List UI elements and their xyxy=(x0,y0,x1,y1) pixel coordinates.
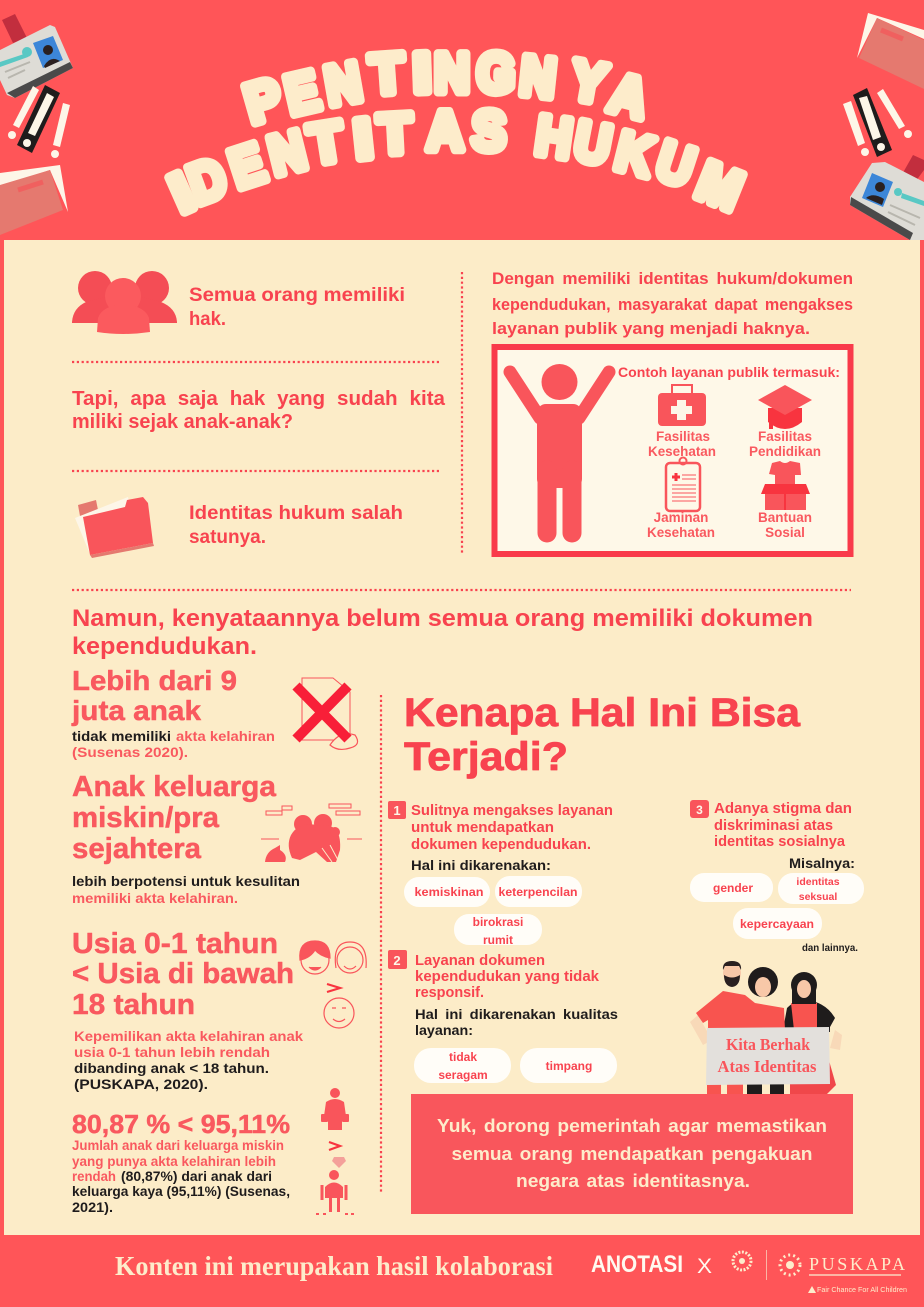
title: I xyxy=(160,160,202,225)
illustration: people with sign xyxy=(690,961,842,1095)
icon: person arms raised xyxy=(510,364,609,533)
pill: gender xyxy=(690,873,773,902)
panel: layanan publik: Kesehatan xyxy=(647,525,715,540)
title xyxy=(160,41,751,225)
text: semua orang: hak. xyxy=(189,309,226,330)
stat: 80,87: rendah xyxy=(72,1169,116,1184)
icon: donation box xyxy=(761,461,810,510)
pill: identitas seksual: identitas xyxy=(796,876,840,888)
title: N xyxy=(320,50,366,118)
title: D xyxy=(180,146,235,217)
pill: kepercayaan: kepercayaan xyxy=(740,917,814,931)
footer: Konten ini merupakan hasil kolaborasi xyxy=(115,1251,553,1281)
stat: usia xyxy=(72,928,303,1092)
pill: birokrasi rumit: birokrasi xyxy=(473,915,523,929)
panel: layanan publik xyxy=(494,347,850,554)
reason 3: dan lainnya. xyxy=(802,942,858,954)
reason 1 xyxy=(388,801,613,947)
heading: kenapa xyxy=(404,691,801,779)
title: N xyxy=(434,42,470,105)
reason 2: Layanan dokumen xyxy=(415,953,545,969)
stat: 9 juta anak: (Susenas 2020). xyxy=(72,745,188,760)
text: tapi: Tapi, apa saja hak yang sudah kita xyxy=(72,388,446,410)
logo: puskapa xyxy=(780,1254,905,1276)
text: dengan memiliki: layanan publik yang menjadi haknya. xyxy=(492,320,810,338)
pill: keterpencilan xyxy=(495,876,582,907)
stat: usia: < Usia di bawah xyxy=(72,958,294,990)
text: identitas hukum: satunya. xyxy=(189,527,266,548)
reason 1: Hal ini dikarenakan: xyxy=(411,857,551,873)
text: dengan memiliki: kependudukan, masyarakat dapat mengakses xyxy=(492,296,853,314)
content panel xyxy=(4,240,920,1235)
reason 2: Hal ini dikarenakan kualitas xyxy=(415,1006,618,1022)
illustration: people with sign: Atas Identitas xyxy=(718,1057,817,1076)
title: K xyxy=(609,120,660,189)
stat: 9 juta anak xyxy=(71,665,275,760)
title: A xyxy=(426,100,464,162)
icon: medical kit xyxy=(658,385,706,426)
title: E xyxy=(279,59,325,128)
stat: anak keluarga miskin: memiliki akta kelahiran. xyxy=(72,890,238,906)
reason 3: diskriminasi atas xyxy=(714,818,833,834)
reason 2: responsif. xyxy=(415,985,484,1001)
stat: anak keluarga miskin xyxy=(72,771,300,906)
stat: 9 juta anak: tidak memiliki xyxy=(72,729,171,744)
title: N xyxy=(517,44,559,110)
title: U xyxy=(569,109,616,178)
title: Y xyxy=(566,48,612,116)
text: tapi: miliki sejak anak-anak? xyxy=(72,411,293,433)
title: T xyxy=(368,41,406,106)
icon: crossed document xyxy=(296,678,358,749)
reason 3: 3 xyxy=(696,803,703,817)
icon: ID card top left xyxy=(0,14,73,98)
illustration: people with sign: Kita Berhak xyxy=(726,1035,811,1054)
stat: usia: 18 tahun xyxy=(72,989,195,1021)
reason 1: untuk mendapatkan xyxy=(411,820,554,836)
pill: timpang: timpang xyxy=(546,1059,592,1073)
logo: puskapa: PUSKAPA xyxy=(809,1254,905,1274)
reason 2: kependudukan yang tidak xyxy=(415,969,600,985)
stat: 80,87: (80,87%) dari anak dari xyxy=(121,1169,272,1184)
logo: anotasi: ANOTASI xyxy=(591,1251,683,1278)
callout: Yuk, dorong pemerintah agar memastikan xyxy=(437,1116,827,1136)
title: T xyxy=(304,109,348,176)
reason 3 xyxy=(690,800,864,954)
panel: layanan publik: Kesehatan xyxy=(648,444,716,459)
stat: anak keluarga miskin: sejahtera xyxy=(72,833,202,865)
text: identitas hukum xyxy=(189,503,403,548)
pill: kemiskinan xyxy=(404,877,490,907)
icon: people group xyxy=(72,271,177,334)
pill: timpang xyxy=(520,1048,617,1083)
heading: kenapa: Terjadi? xyxy=(404,735,568,779)
icon: ID card bottom right xyxy=(850,155,924,240)
text: dengan memiliki xyxy=(492,270,853,338)
pill: keterpencilan: keterpencilan xyxy=(498,885,578,899)
title: S xyxy=(471,99,507,163)
title: H xyxy=(532,104,576,171)
icon: poor vs rich person xyxy=(316,1088,354,1214)
icon: exclamation binder top right xyxy=(843,88,912,157)
text: identitas hukum: Identitas hukum salah xyxy=(189,503,403,524)
pill: identitas seksual xyxy=(778,873,864,904)
title: E xyxy=(222,131,273,201)
logo: university xyxy=(733,1252,751,1270)
panel: layanan publik: Fasilitas xyxy=(758,429,812,444)
icon: graduation cap xyxy=(758,385,812,429)
icon: folder xyxy=(75,497,154,558)
stat: anak keluarga miskin: Anak keluarga xyxy=(72,771,277,803)
stat: 9 juta anak: Lebih dari 9 xyxy=(72,665,237,696)
heading: namun: Namun, kenyataannya belum semua orang memiliki dokumen xyxy=(72,605,813,632)
pill: tidak seragam: seragam xyxy=(438,1068,488,1082)
title: N xyxy=(263,119,312,188)
stat: usia: (PUSKAPA, 2020). xyxy=(74,1076,208,1092)
pill: gender: gender xyxy=(713,881,753,895)
stat: 9 juta anak: juta anak xyxy=(71,695,201,726)
pill: tidak seragam: tidak xyxy=(449,1050,477,1064)
panel: layanan publik: Pendidikan xyxy=(749,444,821,459)
text: semua orang xyxy=(189,285,405,330)
stat: usia: usia 0-1 tahun lebih rendah xyxy=(74,1044,270,1060)
footer: Fair Chance For All Children xyxy=(817,1287,907,1294)
pill: tidak seragam xyxy=(414,1048,511,1083)
pill: birokrasi rumit xyxy=(454,914,542,947)
heading: namun: kependudukan. xyxy=(72,633,257,660)
reason 1: Sulitnya mengakses layanan xyxy=(411,803,613,819)
icon: clipboard xyxy=(666,458,700,511)
heading: kenapa: Kenapa Hal Ini Bisa xyxy=(404,691,801,735)
reason 2 xyxy=(388,950,618,1083)
pill: kemiskinan: kemiskinan xyxy=(414,885,484,899)
reason 3: identitas sosialnya xyxy=(714,834,846,850)
stat: usia: Usia 0-1 tahun xyxy=(72,928,278,960)
heading: namun xyxy=(72,605,813,660)
icon: poor family xyxy=(261,804,362,862)
title: T xyxy=(376,101,414,166)
stat: 80,87: Jumlah anak dari keluarga miskin xyxy=(72,1138,284,1153)
title: M xyxy=(688,149,751,223)
footer xyxy=(115,1250,907,1294)
icon: child faces xyxy=(300,941,366,1028)
stat: usia: dibanding anak < 18 tahun. xyxy=(74,1060,269,1076)
stat: 80,87: 2021). xyxy=(72,1200,113,1215)
text: dengan memiliki: Dengan memiliki identitas hukum/dokumen xyxy=(492,270,853,288)
stat: anak keluarga miskin: lebih berpotensi untuk kesulitan xyxy=(72,873,300,889)
icon: folder top right xyxy=(857,13,924,89)
title: I xyxy=(351,106,375,171)
icon: folder bottom left xyxy=(0,165,68,235)
stat: 80,87: 80,87 % < 95,11% xyxy=(72,1109,290,1139)
title: U xyxy=(649,129,702,200)
panel: layanan publik: Bantuan xyxy=(758,510,812,525)
pill: birokrasi rumit: rumit xyxy=(483,933,513,947)
stat: 80,87 xyxy=(72,1109,290,1215)
footer: X xyxy=(697,1255,712,1278)
pill: kepercayaan xyxy=(733,908,822,939)
panel: layanan publik: Fasilitas xyxy=(656,429,710,444)
callout: negara atas identitasnya. xyxy=(516,1171,750,1191)
stat: 80,87: keluarga kaya (95,11%) (Susenas, xyxy=(72,1184,290,1199)
title: I xyxy=(412,41,432,104)
reason 2: 2 xyxy=(393,953,401,968)
text: tapi xyxy=(72,388,446,433)
text: semua orang: Semua orang memiliki xyxy=(189,285,405,306)
callout: semua orang mendapatkan pengakuan xyxy=(452,1144,812,1164)
callout xyxy=(411,1094,853,1214)
title: A xyxy=(603,61,654,131)
title: G xyxy=(476,41,516,105)
panel: layanan publik: Sosial xyxy=(765,525,805,540)
stat: 9 juta anak: akta kelahiran xyxy=(176,729,275,744)
stat: 80,87: yang punya akta kelahiran lebih xyxy=(72,1154,276,1169)
icon: exclamation binder top left xyxy=(8,85,70,158)
reason 3: Adanya stigma dan xyxy=(714,801,852,817)
stat: usia: Kepemilikan akta kelahiran anak xyxy=(74,1028,303,1044)
title: P xyxy=(238,66,289,136)
pill: identitas seksual: seksual xyxy=(799,891,837,903)
panel: layanan publik: Jaminan xyxy=(654,510,708,525)
reason 1: 1 xyxy=(393,803,401,818)
reason 1: dokumen kependudukan. xyxy=(411,837,591,853)
reason 2: layanan: xyxy=(415,1022,473,1038)
stat: anak keluarga miskin: miskin/pra xyxy=(72,802,220,834)
reason 3: Misalnya: xyxy=(789,855,855,871)
panel: layanan publik: Contoh layanan publik termasuk: xyxy=(618,364,840,380)
